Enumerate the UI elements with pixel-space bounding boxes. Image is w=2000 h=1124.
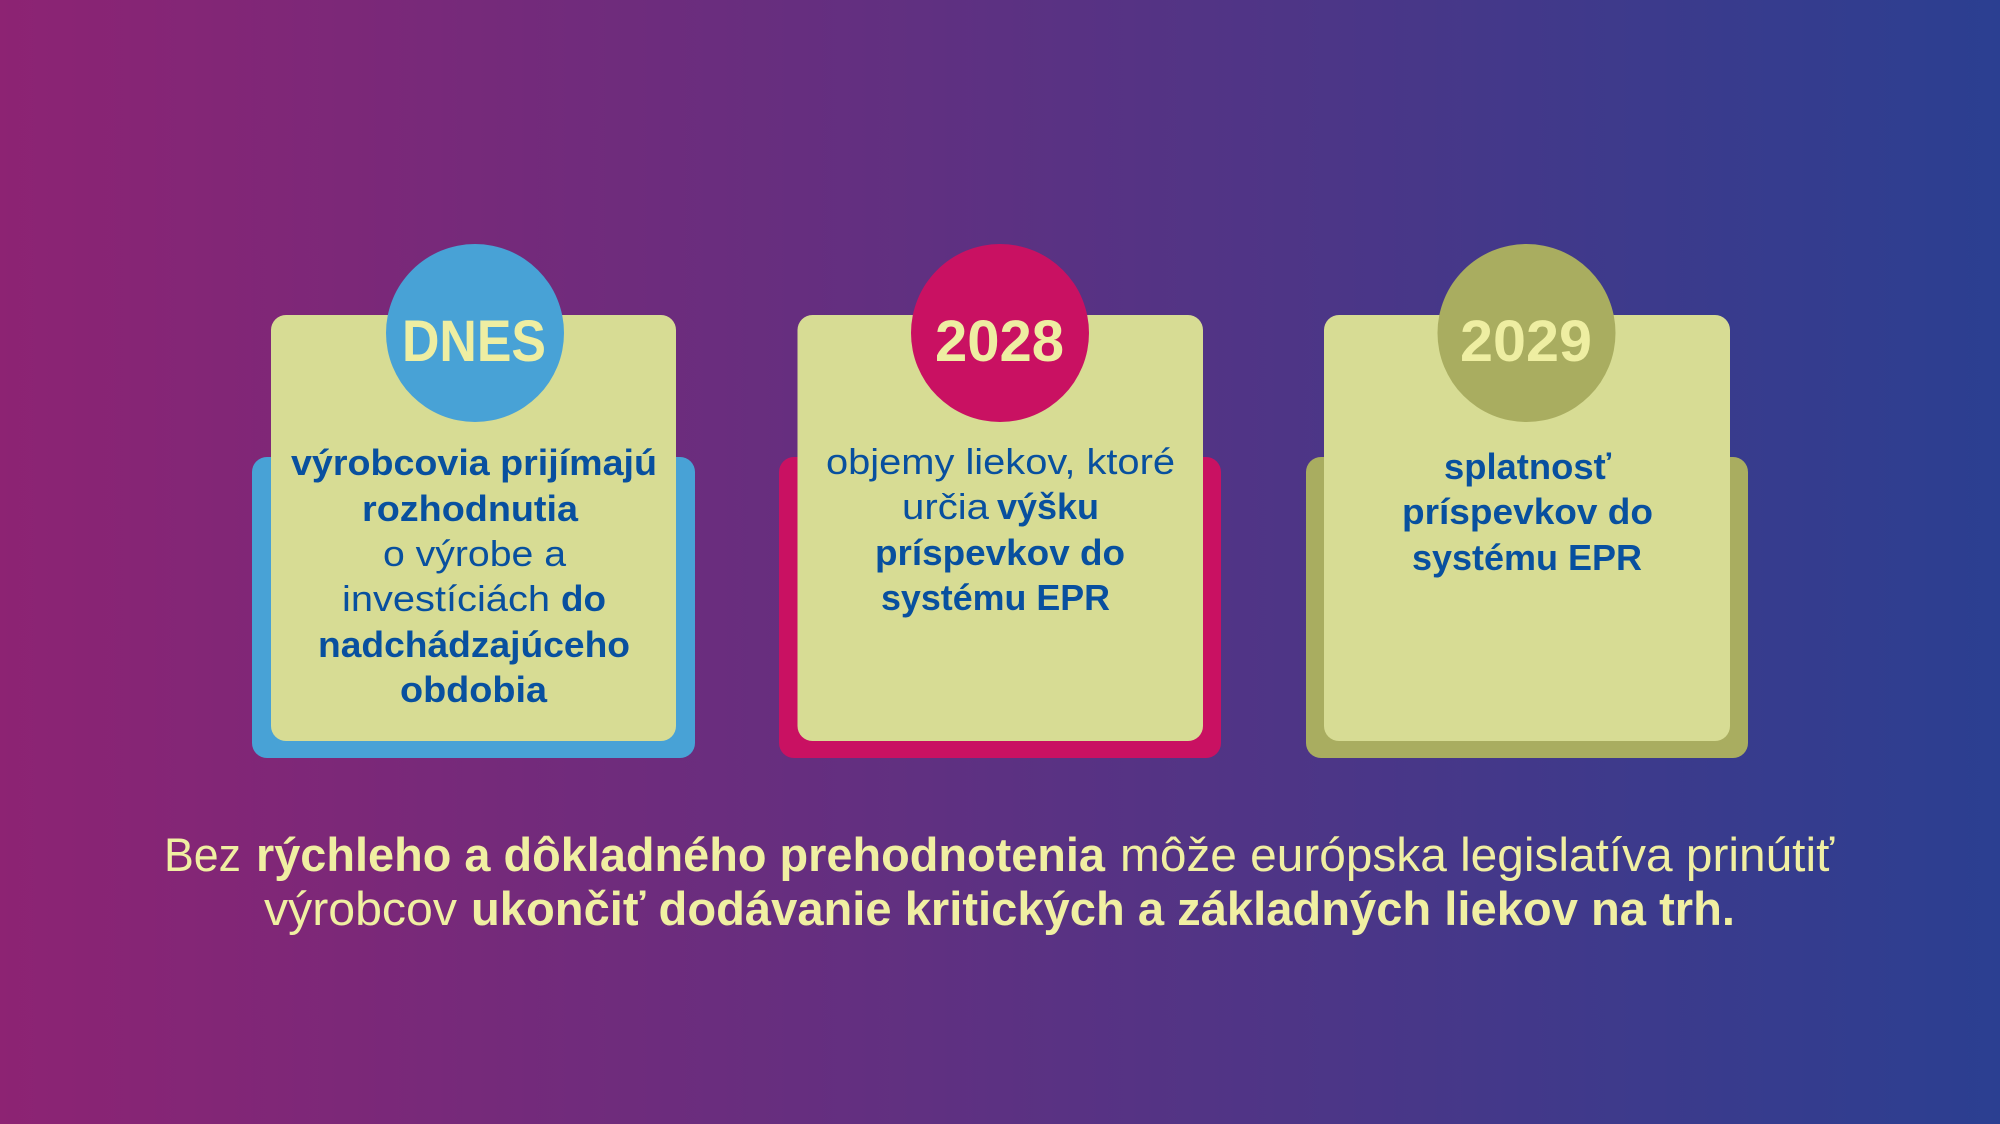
card text: nadchádzajúceho [318,624,630,665]
card text [826,441,1175,618]
card text: objemy liekov, ktoré [826,441,1175,482]
panel: 2028 [779,244,1221,758]
card [1324,315,1730,741]
badge: DNES [386,244,564,422]
card text: investíciách [342,578,550,619]
card [271,315,676,741]
card text: príspevkov do [1402,491,1653,532]
panel: 2029 [1306,244,1748,758]
card [798,315,1203,741]
closing statement [164,828,1835,935]
card text: splatnosť [1444,446,1612,487]
closing statement: ukončiť dodávanie kritických a základných liekov na trh. [471,882,1735,935]
card text: systému EPR [881,577,1110,618]
card text: príspevkov do [875,532,1125,573]
card text: systému EPR [1412,537,1642,578]
badge: DNES: DNES [402,309,546,374]
closing statement: môže európska legislatíva prinútiť [1120,828,1835,881]
closing statement: Bez [164,828,241,881]
panel: DNES [252,244,695,758]
card text: o výrobe a [383,533,567,574]
card text: výrobcovia prijímajú [291,442,657,483]
badge: 2028 [911,244,1089,422]
card text [291,442,657,710]
badge: 2028: 2028 [935,309,1064,374]
backing shape [252,457,695,758]
card text: výšku [997,486,1099,527]
card text: rozhodnutia [362,488,579,529]
backing shape [779,457,1221,758]
backing shape [1306,457,1748,758]
card text: do [561,578,606,619]
badge: 2029: 2029 [1460,309,1592,374]
closing statement: výrobcov [264,882,458,935]
badge: 2029 [1438,244,1616,422]
card text: obdobia [400,669,548,710]
card text: určia [902,486,990,527]
closing statement: rýchleho a dôkladného prehodnotenia [256,828,1106,881]
card text [1402,446,1653,578]
